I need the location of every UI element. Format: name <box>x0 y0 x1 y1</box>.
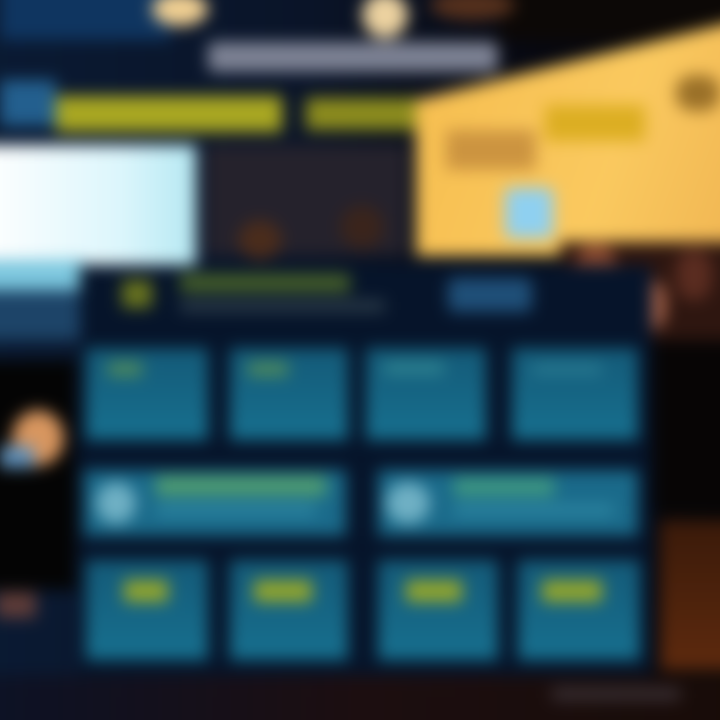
card row 1, card 1 <box>86 348 208 440</box>
card 3 heading <box>384 362 444 374</box>
wide card left title <box>156 476 326 496</box>
top right dark area <box>500 0 720 40</box>
lower right dark <box>640 340 720 510</box>
right lower floor glow <box>660 520 720 670</box>
wide card right <box>378 470 638 536</box>
heading yellow-green right <box>306 98 424 130</box>
card 5 value <box>124 580 168 602</box>
main dark panel <box>80 265 652 675</box>
wide card right text <box>454 504 614 516</box>
card 7 value <box>406 580 462 602</box>
silhouette warm face two <box>630 280 666 330</box>
footer mark <box>552 688 680 700</box>
wide card left icon <box>96 482 136 524</box>
bottom floor band <box>0 675 720 720</box>
right upper head <box>676 250 712 300</box>
wide card right icon <box>386 482 430 524</box>
section header title <box>180 274 350 292</box>
photo: left lower ground <box>0 290 80 340</box>
card 6 value <box>254 580 312 602</box>
right panel blue window <box>505 188 553 238</box>
card 2 heading <box>248 362 288 376</box>
wide card left <box>84 470 346 536</box>
card 8 value <box>542 580 602 602</box>
photo: left sky panel <box>0 145 196 267</box>
card row 1, card 2 <box>230 348 348 440</box>
left figure blue sleeve <box>0 446 34 468</box>
ceiling light right <box>362 0 408 38</box>
section header button <box>448 278 532 312</box>
heading yellow-green left <box>56 96 282 132</box>
wide card right title <box>454 478 554 496</box>
card row 3, card 4 <box>518 560 640 660</box>
photo: centre warm spot <box>238 220 282 260</box>
right panel upper dark corner <box>676 75 720 111</box>
title bar <box>208 42 498 72</box>
silhouette warm face <box>574 245 618 315</box>
photo: centre dark interior <box>206 145 406 255</box>
right panel brown detail <box>446 130 536 170</box>
card row 1, card 4 <box>512 348 638 440</box>
left low warm detail <box>0 592 36 618</box>
photo: right yellow panel <box>416 20 720 256</box>
card 4 heading <box>532 364 602 374</box>
photo: left sky lower <box>0 260 85 298</box>
top blue header glow <box>0 0 170 40</box>
card row 1, card 3 <box>366 348 486 440</box>
right panel yellow highlight <box>545 105 645 141</box>
card 1 heading <box>108 362 142 376</box>
left figure dark <box>0 360 76 590</box>
photo: centre warm spot right <box>340 205 384 249</box>
left figure warm spot <box>12 410 64 466</box>
section header subtitle <box>180 300 385 312</box>
heading band left cap <box>0 80 56 126</box>
card row 3, card 3 <box>378 560 498 660</box>
wide card left text <box>156 504 316 516</box>
ceiling warm lamp <box>430 0 515 20</box>
card row 3, card 1 <box>86 560 208 660</box>
ceiling light left <box>152 0 208 26</box>
section header icon <box>122 280 152 308</box>
people silhouettes at right <box>560 242 720 342</box>
card row 3, card 2 <box>230 560 348 660</box>
